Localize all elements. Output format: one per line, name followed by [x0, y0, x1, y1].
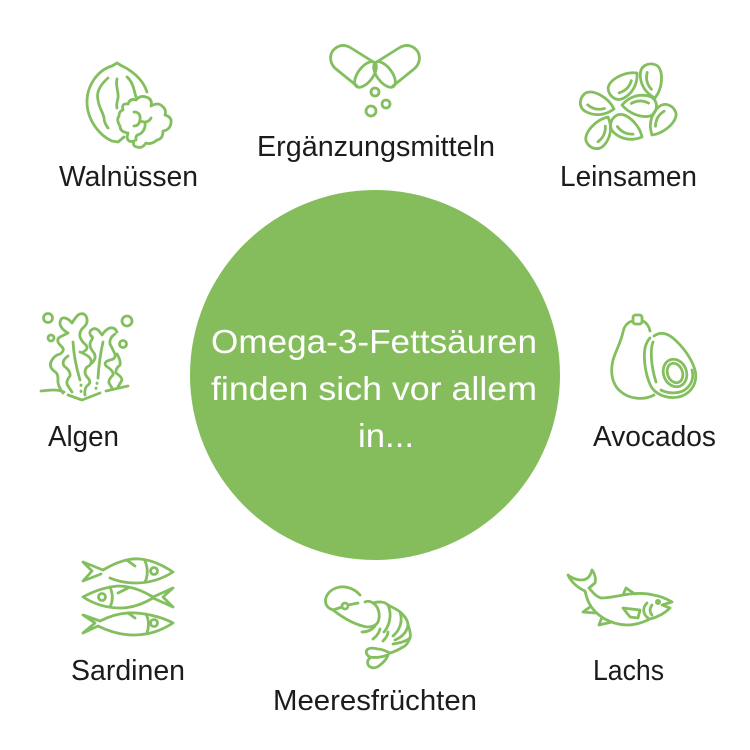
item: Ergänzungsmitteln	[257, 45, 495, 163]
item: Algen	[41, 314, 132, 453]
item: Sardinen	[71, 559, 185, 687]
icon: walnut	[87, 63, 171, 148]
icon: capsules	[331, 45, 419, 116]
central circle with heading	[190, 190, 560, 560]
icon: avocado	[612, 315, 696, 398]
label: Sardinen: Sardinen	[71, 655, 185, 687]
item: Leinsamen	[560, 63, 697, 193]
icon: sardines	[83, 559, 173, 635]
label: Walnüssen: Walnüssen	[59, 161, 198, 193]
central circle with heading: finden sich vor allem	[211, 371, 537, 408]
item: Meeresfrüchten	[273, 587, 477, 717]
central circle with heading: Omega-3-Fettsäuren	[211, 324, 537, 361]
label: Meeresfrüchten: Meeresfrüchten	[273, 685, 477, 717]
icon: algae	[41, 314, 132, 400]
label: Lachs: Lachs	[593, 655, 664, 687]
item: Walnüssen	[59, 63, 198, 193]
icon: flax seeds	[577, 63, 680, 153]
label: Avocados: Avocados	[593, 421, 716, 453]
central circle with heading: in...	[358, 418, 414, 455]
item: Avocados	[593, 315, 716, 453]
icon: salmon	[568, 570, 672, 625]
icon: shrimp	[325, 587, 410, 668]
label: Ergänzungsmitteln: Ergänzungsmitteln	[257, 131, 495, 163]
item: Lachs	[568, 570, 672, 687]
label: Algen: Algen	[48, 421, 119, 453]
label: Leinsamen: Leinsamen	[560, 161, 697, 193]
